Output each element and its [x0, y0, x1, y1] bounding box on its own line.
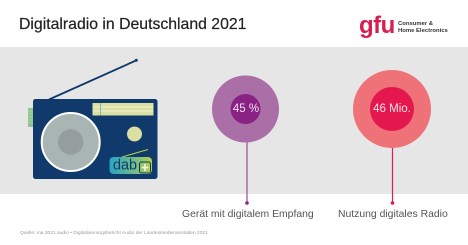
volume knob [127, 126, 142, 142]
frequency display [92, 103, 154, 116]
antenna [49, 59, 138, 100]
red stat inner circle [370, 87, 414, 131]
purple stat connector [245, 142, 249, 205]
radio body [33, 99, 158, 179]
logo tagline: Consumer & [398, 21, 433, 27]
purple stat outer circle [212, 76, 279, 142]
dab+ logo: dab [113, 156, 137, 174]
label: Nutzung digitales Radio: Nutzung digitales Radio [338, 209, 448, 220]
logo tagline [398, 21, 448, 34]
label: Gerät mit digitalem Empfang: Gerät mit digitalem Empfang [182, 209, 314, 220]
purple stat inner circle [230, 94, 260, 124]
logo tagline: Home Electronics [398, 28, 448, 34]
value: 46 Mio.: 46 Mio. [373, 103, 411, 115]
source note: Quelle: ma 2021 audio • Digitalisierungsbericht Audio der Landesmedienanstalten 2021 [20, 231, 208, 236]
gray background band [0, 47, 468, 194]
red stat connector [391, 148, 394, 205]
speaker dial [42, 113, 100, 171]
red stat outer circle [353, 70, 431, 148]
title: Digitalradio in Deutschland 2021 [19, 16, 246, 33]
logo: gfu Consumer & Home Electronics [359, 12, 448, 39]
value: 45 %: 45 % [233, 103, 259, 115]
tuning wheel on the side [28, 108, 34, 127]
logo wordmark: gfu [359, 12, 395, 39]
